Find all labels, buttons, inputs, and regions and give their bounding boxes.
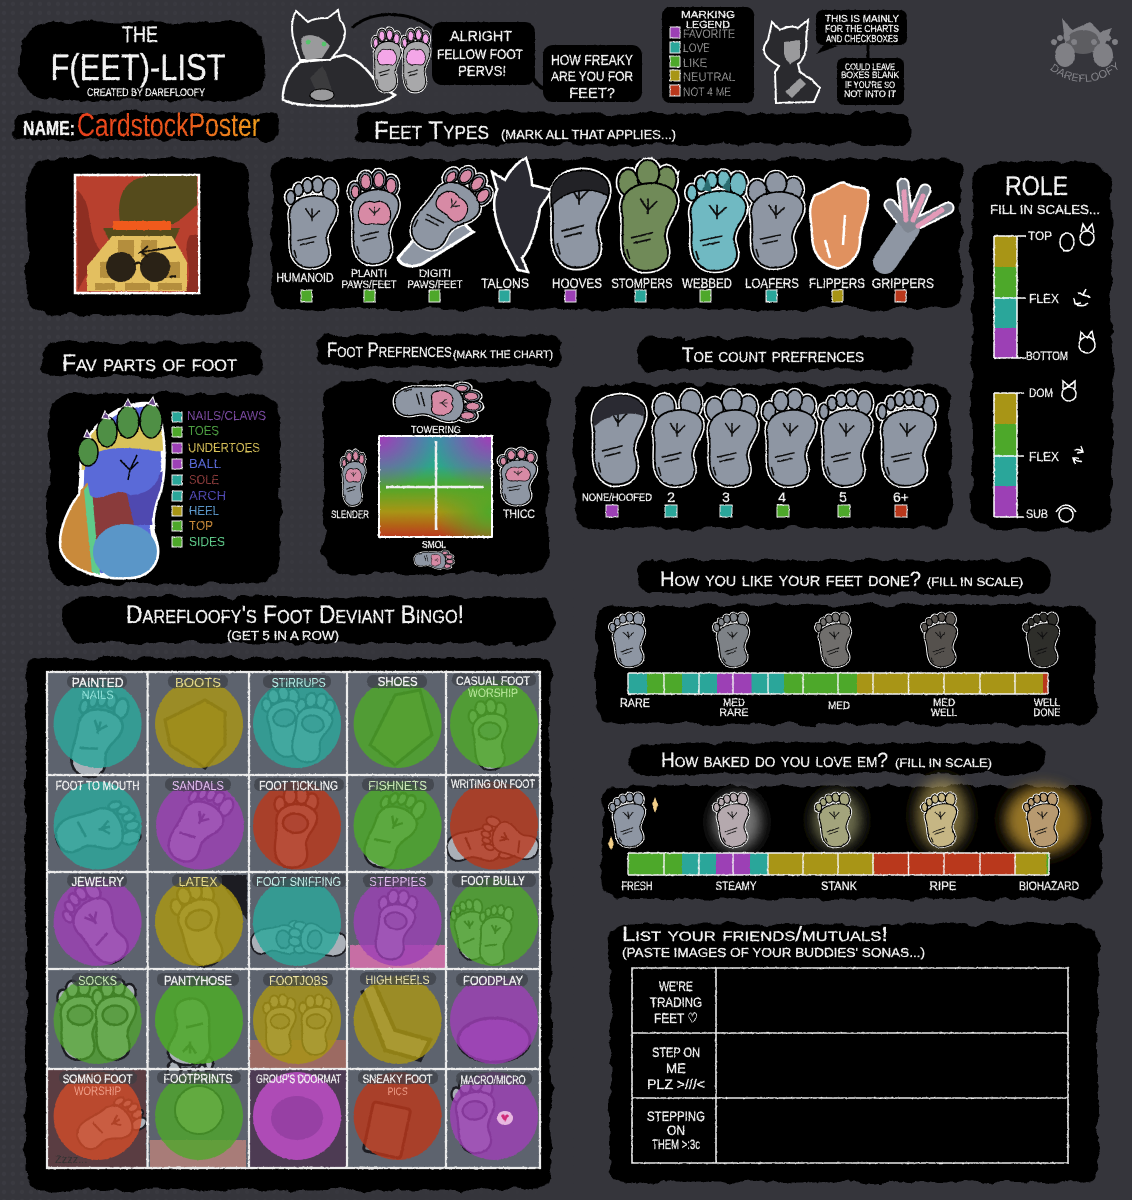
watermark: dareflocfy logo xyxy=(1050,18,1118,82)
foot: slender xyxy=(341,450,365,505)
bingo cell: sandals xyxy=(156,778,244,870)
bingo cell: foodplay xyxy=(450,973,538,1064)
bingo cell: boots xyxy=(155,675,243,768)
scale: top to bottom: FLEX xyxy=(1029,291,1059,306)
foot: flippers xyxy=(810,182,868,268)
name field: CardstockPoster xyxy=(77,107,260,143)
scale: top to bottom: TOP xyxy=(1028,229,1052,243)
speech bubble: mainly for charts: FOR THE CHARTS xyxy=(825,24,899,35)
speech bubble: mainly for charts: THIS IS MAINLY xyxy=(825,14,899,25)
character: pointing wolf xyxy=(764,20,820,103)
portrait: waffle in hat and glasses xyxy=(75,175,199,293)
foot: towering xyxy=(395,383,482,421)
bingo cell: fishnets xyxy=(354,778,442,875)
row label: trading feet: TRADING xyxy=(650,994,702,1010)
baked bar xyxy=(628,853,1049,875)
bingo cell: writing on foot xyxy=(444,776,544,870)
toe count labels: NONE/HOOFED xyxy=(582,492,652,504)
foot: loafers xyxy=(748,172,803,268)
parts list checkboxes xyxy=(172,412,182,547)
baked labels xyxy=(622,881,1079,893)
foot type labels: FLIPPERS xyxy=(809,275,865,291)
bingo cell: socks xyxy=(54,973,142,1064)
foot: smol xyxy=(415,551,454,569)
speech bubble: leave boxes blank xyxy=(837,58,904,105)
bingo cell: foot tickling xyxy=(253,778,344,870)
panel: marking legend: MARKING xyxy=(681,9,735,21)
bingo cell: group's doormat xyxy=(250,1070,347,1167)
parts list labels: SOLE xyxy=(189,472,219,487)
baked feet xyxy=(608,791,1064,849)
foot: 3 toes xyxy=(706,390,758,486)
foot type labels: HOOVES xyxy=(552,275,602,291)
row label: step on me: STEP ON xyxy=(652,1044,700,1060)
bingo cell: macro micro: MACRO/MICRO xyxy=(460,1073,526,1087)
panel: baked scale xyxy=(602,779,1102,899)
foot: grippers xyxy=(885,184,948,262)
parts list labels: NAILS/CLAWS xyxy=(187,408,266,423)
heading: how baked do you love em: How baked do you love em? xyxy=(661,749,888,772)
panel: role: ROLE xyxy=(1005,171,1068,201)
legend labels: LOVE xyxy=(683,41,710,55)
baked labels: FRESH xyxy=(622,881,652,893)
foot type labels: PLANTI xyxy=(351,268,387,280)
foot: no toes xyxy=(593,395,645,485)
parts list labels: SIDES xyxy=(189,534,225,549)
speech bubble: alright fellow foot pervs: ALRIGHT xyxy=(450,28,512,45)
parts list labels: ARCH xyxy=(189,488,226,503)
heading: foot preferences: (MARK THE CHART) xyxy=(453,349,553,361)
heading: feet types: Feet Types xyxy=(374,117,489,145)
heading: foot preferences xyxy=(316,335,562,367)
parts list labels: BALL xyxy=(189,456,221,471)
speech bubble: how freaky are you for feet: FEET? xyxy=(569,85,615,102)
title block: THE xyxy=(122,22,158,47)
foot type labels: PAWS/FEET xyxy=(408,279,463,291)
foot: webbed xyxy=(687,171,747,271)
name field: NAME: xyxy=(23,118,75,140)
preference gradient chart xyxy=(379,436,492,537)
baked labels: RIPE xyxy=(930,881,957,893)
bingo cell: latex: LATEX xyxy=(178,874,218,889)
speech bubble: how freaky are you for feet xyxy=(530,45,642,102)
panel: foot preferences: TOWERING xyxy=(411,424,461,436)
bingo cell: casual foot worship: WORSHIP xyxy=(468,686,518,700)
doneness labels: WELL xyxy=(1034,697,1060,709)
bingo cell: foodplay: FOODPLAY xyxy=(463,973,523,988)
bingo cell: foot sniffing xyxy=(249,874,349,966)
title block: F(EET)-LIST xyxy=(50,47,226,88)
bingo cell: stirrups xyxy=(253,675,341,768)
bingo cell: foot sniffing: FOOT SNIFFING xyxy=(256,874,341,889)
bingo cell: foot tickling: FOOT TICKLING xyxy=(259,778,338,793)
legend labels: LIKE xyxy=(683,56,707,70)
scale: top to bottom xyxy=(994,229,1068,363)
legend labels: NOT 4 ME xyxy=(683,85,731,99)
doneness labels: RARE xyxy=(620,698,650,710)
bingo cell: painted nails: PAINTED xyxy=(72,675,124,690)
title block: CREATED BY DAREFLOOFY xyxy=(87,87,206,99)
doneness bar xyxy=(628,673,1048,694)
panel: foot preferences: SLENDER xyxy=(331,509,369,521)
parts list labels: TOP xyxy=(189,518,213,533)
toe count labels xyxy=(582,489,909,505)
panel: list your friends xyxy=(610,924,1098,1182)
speech bubble: leave boxes blank: NOT INTO IT xyxy=(844,89,896,99)
doneness labels: MED xyxy=(828,700,850,712)
panel: foot preferences xyxy=(323,381,549,574)
bingo cell: somno foot worship: SOMNO FOOT xyxy=(63,1072,133,1086)
foot type labels: HUMANOID xyxy=(276,270,334,285)
bingo cell: foot to mouth: FOOT TO MOUTH xyxy=(56,778,140,793)
parts list labels xyxy=(187,408,266,549)
toe count labels: 3 xyxy=(722,489,730,505)
bingo cell: shoes: SHOES xyxy=(378,674,418,689)
row label: stepping on them: STEPPING xyxy=(647,1108,705,1124)
foot: humanoid xyxy=(286,178,337,268)
bingo cell: somno foot worship xyxy=(48,1070,150,1167)
foot type checkboxes xyxy=(301,290,906,302)
foot: 6 or more toes xyxy=(878,391,936,486)
toe count labels: 5 xyxy=(839,489,847,505)
parts list labels: TOES xyxy=(188,423,219,438)
bingo cell: foot to mouth xyxy=(51,778,143,870)
bingo cell: latex xyxy=(155,874,247,971)
foot type labels: DIGITI xyxy=(419,268,451,280)
scale: dom to sub: FLEX xyxy=(1029,449,1059,464)
heading: bingo: (GET 5 IN A ROW) xyxy=(227,628,339,643)
bingo cell: fishnets: FISHNETS xyxy=(368,778,427,793)
foot type labels: TALONS xyxy=(481,275,529,291)
scale: dom to sub xyxy=(994,386,1059,521)
bingo cell: foot bully xyxy=(448,873,538,966)
bingo cell: jewelry: JEWELRY xyxy=(72,874,124,889)
row label: trading feet: WE'RE xyxy=(659,978,693,994)
row label: step on me: ME xyxy=(666,1060,686,1076)
icons: dom flex sub xyxy=(1056,381,1083,522)
toe count labels: 4 xyxy=(778,489,786,505)
bingo cell: sneaky foot pics: PICS xyxy=(388,1086,408,1098)
speech bubble: mainly for charts xyxy=(816,10,907,60)
speech bubble: leave boxes blank: BOXES BLANK xyxy=(841,70,899,80)
heading: fav parts of foot: Fav parts of foot xyxy=(62,350,237,377)
title block xyxy=(20,22,265,100)
foot: talons xyxy=(492,158,552,272)
row label: stepping on them: THEM >:3c xyxy=(652,1136,700,1152)
doneness labels: DONE xyxy=(1034,707,1060,719)
bingo cell: shoes xyxy=(354,674,442,768)
heading: feet types xyxy=(356,113,912,145)
legend labels xyxy=(683,27,735,99)
name field xyxy=(12,107,280,143)
foot diagram by parts xyxy=(57,397,165,580)
panel: toe count preferences xyxy=(575,384,951,528)
bingo cell: pantyhose xyxy=(155,973,243,1082)
bingo cell: socks: SOCKS xyxy=(78,973,117,988)
bingo cell: foot bully: FOOT BULLY xyxy=(461,873,525,888)
foot type labels xyxy=(276,268,934,291)
scale: top to bottom: BOTTOM xyxy=(1026,351,1068,363)
panel: foot preferences: THICC xyxy=(503,507,535,521)
heading: foot preferences: Foot Prefrences xyxy=(327,339,452,362)
toe count labels: 6+ xyxy=(893,489,909,505)
bingo cell: jewelry xyxy=(54,874,142,972)
foot: stompers xyxy=(618,156,680,271)
bingo cell: footprints: FOOTPRINTS xyxy=(164,1071,233,1086)
panel: role: FILL IN SCALES... xyxy=(990,202,1100,217)
watermark: dareflocfy logo: DAREFLOOFY xyxy=(1050,62,1118,82)
baked labels: STEAMY xyxy=(716,881,757,893)
panel: marking legend xyxy=(662,7,754,103)
bingo cell: sandals: SANDALS xyxy=(172,778,224,793)
foot: 2 toes xyxy=(654,390,703,486)
speech bubble: alright fellow foot pervs: FELLOW FOOT xyxy=(437,46,523,62)
parts list labels: HEEL xyxy=(189,503,219,518)
bingo cell: steppies xyxy=(350,874,445,970)
panel: bingo board xyxy=(26,658,551,1190)
heading: toe count preferences xyxy=(638,338,913,370)
heading: bingo xyxy=(64,597,554,643)
bingo cell: writing on foot: WRITING ON FOOT xyxy=(451,777,536,791)
bingo cell: boots: BOOTS xyxy=(175,675,221,690)
icons: top flex bottom xyxy=(1060,224,1095,353)
heading: how baked do you love em xyxy=(630,743,1046,774)
speech bubble: leave boxes blank: COULD LEAVE xyxy=(845,62,895,72)
stink glows xyxy=(713,779,1081,854)
panel: profile picture xyxy=(27,158,250,315)
foot type labels: GRIPPERS xyxy=(872,275,934,291)
scale: dom to sub: SUB xyxy=(1026,507,1048,521)
bingo cell: painted nails: NAILS xyxy=(82,688,114,702)
doneness labels: MED xyxy=(723,697,745,709)
friends table xyxy=(632,968,1068,1163)
row label: step on me xyxy=(647,1044,705,1092)
bingo cell: footprints xyxy=(150,1071,246,1168)
bingo cell: stirrups: STIRRUPS xyxy=(272,675,326,690)
heading: how you like your feet done xyxy=(638,560,1050,594)
toe count labels: 2 xyxy=(667,489,675,505)
foot: 4 toes xyxy=(763,390,816,486)
panel: list your friends: List your friends/mutuals! xyxy=(622,924,888,946)
panel: feet types xyxy=(271,156,961,309)
panel: marking legend: LEGEND xyxy=(686,19,730,31)
speech bubble: how freaky are you for feet: ARE YOU FOR xyxy=(551,68,633,84)
foot: hooves xyxy=(551,171,609,268)
legend swatches xyxy=(670,27,680,96)
bingo cell: sneaky foot pics xyxy=(354,1071,442,1160)
heading: fav parts of foot xyxy=(42,342,262,377)
heading: bingo: Darefloofy's Foot Deviant Bingo! xyxy=(126,601,464,629)
heading: how you like your feet done: How you like your feet done? xyxy=(660,568,921,591)
legend labels: NEUTRAL xyxy=(683,70,735,84)
toe count checkboxes xyxy=(606,505,907,517)
speech bubble: how freaky are you for feet: HOW FREAKY xyxy=(551,52,633,69)
character: wolf holding up paws xyxy=(283,10,432,106)
doneness feet xyxy=(608,611,1064,669)
speech bubble: mainly for charts: AND CHECKBOXES xyxy=(826,34,898,45)
row label: trading feet xyxy=(650,978,702,1026)
heading: how baked do you love em: (FILL IN SCALE) xyxy=(895,756,992,770)
parts list labels: UNDERTOES xyxy=(188,440,260,455)
heading: toe count preferences: Toe count prefrences xyxy=(682,344,864,367)
bingo cell: steppies: STEPPIES xyxy=(369,874,426,889)
panel: doneness scale xyxy=(596,605,1096,724)
row label: stepping on them: ON xyxy=(667,1122,685,1138)
row label: step on me: PLZ >///< xyxy=(647,1076,705,1092)
panel: role xyxy=(972,162,1112,530)
bingo cell: footjobs xyxy=(250,973,347,1068)
bingo cell: pantyhose: PANTYHOSE xyxy=(164,973,232,988)
row label: stepping on them xyxy=(647,1108,705,1152)
heading: feet types: (MARK ALL THAT APPLIES...) xyxy=(501,127,676,142)
doneness labels: MED xyxy=(933,697,955,709)
foot type labels: PAWS/FEET xyxy=(342,279,397,291)
speech bubble: alright fellow foot pervs: PERVS! xyxy=(458,63,506,80)
heading: how you like your feet done: (FILL IN SCALE) xyxy=(927,575,1023,589)
foot: digitigrade paw xyxy=(398,156,499,266)
foot type labels: WEBBED xyxy=(682,275,732,291)
bingo cell: casual foot worship xyxy=(450,673,538,771)
bingo cell: macro micro xyxy=(450,1072,538,1160)
sparkles xyxy=(608,797,658,850)
scale: dom to sub: DOM xyxy=(1029,386,1053,400)
panel: list your friends: (PASTE IMAGES OF YOUR BUDDIES' SONAS...) xyxy=(622,945,925,960)
baked labels: STANK xyxy=(821,881,857,893)
legend labels: FAVORITE xyxy=(683,27,735,41)
bingo cell: somno foot worship: Zzzz... xyxy=(55,1154,87,1166)
bingo cell: painted nails xyxy=(54,675,142,783)
panel: foot preferences: SMOL xyxy=(422,540,446,551)
doneness labels xyxy=(620,697,1060,719)
foot: plantigrade paw xyxy=(349,170,399,264)
bingo cell: sneaky foot pics: SNEAKY FOOT xyxy=(363,1072,433,1086)
bingo cell: group's doormat: GROUP'S DOORMAT xyxy=(256,1072,342,1086)
foot type labels: STOMPERS xyxy=(612,275,672,291)
baked labels: BIOHAZARD xyxy=(1019,881,1079,893)
doneness labels: WELL xyxy=(931,707,957,719)
bingo cell: high heels xyxy=(354,972,442,1064)
doneness labels: RARE xyxy=(720,707,748,719)
bingo cell: casual foot worship: CASUAL FOOT xyxy=(456,674,531,688)
bingo cell: high heels: HIGH HEELS xyxy=(366,973,430,987)
speech bubble: alright fellow foot pervs xyxy=(432,22,535,85)
bingo cell: somno foot worship: WORSHIP xyxy=(74,1084,121,1098)
row label: trading feet: FEET ♡ xyxy=(654,1010,698,1026)
foot: 5 toes xyxy=(819,391,872,486)
foot: thicc xyxy=(498,448,536,505)
bingo grid lines xyxy=(47,672,540,1168)
bingo cell: footjobs: FOOTJOBS xyxy=(269,973,328,988)
speech bubble: leave boxes blank: IF YOU'RE SO xyxy=(845,80,895,90)
panel: fav parts of foot xyxy=(48,394,280,584)
foot type labels: LOAFERS xyxy=(745,275,799,291)
